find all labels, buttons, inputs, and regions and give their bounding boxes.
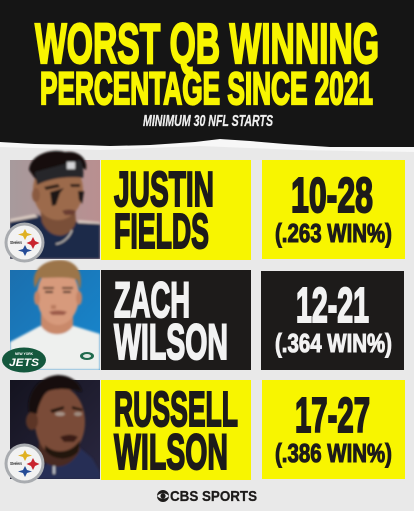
photo: Russell Wilson [10,375,100,479]
icon: Steelers logo: Steelers [10,461,22,466]
icon: Jets logo: NEW YORK [15,351,33,356]
icon: Steelers logo: Steelers [10,240,22,245]
row 1: Justin Fields [4,151,405,262]
name: Russell Wilson: WILSON [114,424,228,480]
icon: small jets chest logo [80,352,94,360]
row 2: Zach Wilson [2,260,404,372]
row 3: Russell Wilson [4,375,405,484]
torn paper edge [0,139,414,152]
icon: Steelers logo [4,222,44,262]
name panel: Zach Wilson [101,270,251,370]
subtitle: MINIMUM 30 NFL STARTS [143,113,273,130]
name panel: Justin Fields [101,160,251,260]
name: Zach Wilson [114,272,228,370]
name: Zach Wilson: WILSON [114,314,228,370]
name: Zach Wilson: ZACH [114,272,190,328]
logo text: CBS SPORTS [170,488,257,505]
photo: Zach Wilson [10,260,100,370]
icon: Steelers logo [4,444,44,484]
record: Justin Fields: 10-28 [291,169,373,223]
icon: Jets logo: JETS [9,357,40,369]
name panel: Russell Wilson [101,380,251,480]
photo: Justin Fields [10,151,100,259]
title [35,12,379,114]
name: Justin Fields: JUSTIN [114,163,214,217]
CBS Sports logo [157,488,257,505]
icon: Jets logo [2,348,46,372]
stat panel: Zach Wilson [261,271,404,370]
icon: CBS eye [157,490,169,502]
header background [0,0,414,147]
name: Russell Wilson: RUSSELL [114,383,238,437]
stat panel: Justin Fields [262,160,405,259]
name: Justin Fields [114,163,214,259]
name: Russell Wilson [114,383,238,480]
stat panel: Russell Wilson [262,380,405,479]
name: Justin Fields: FIELDS [114,205,209,259]
